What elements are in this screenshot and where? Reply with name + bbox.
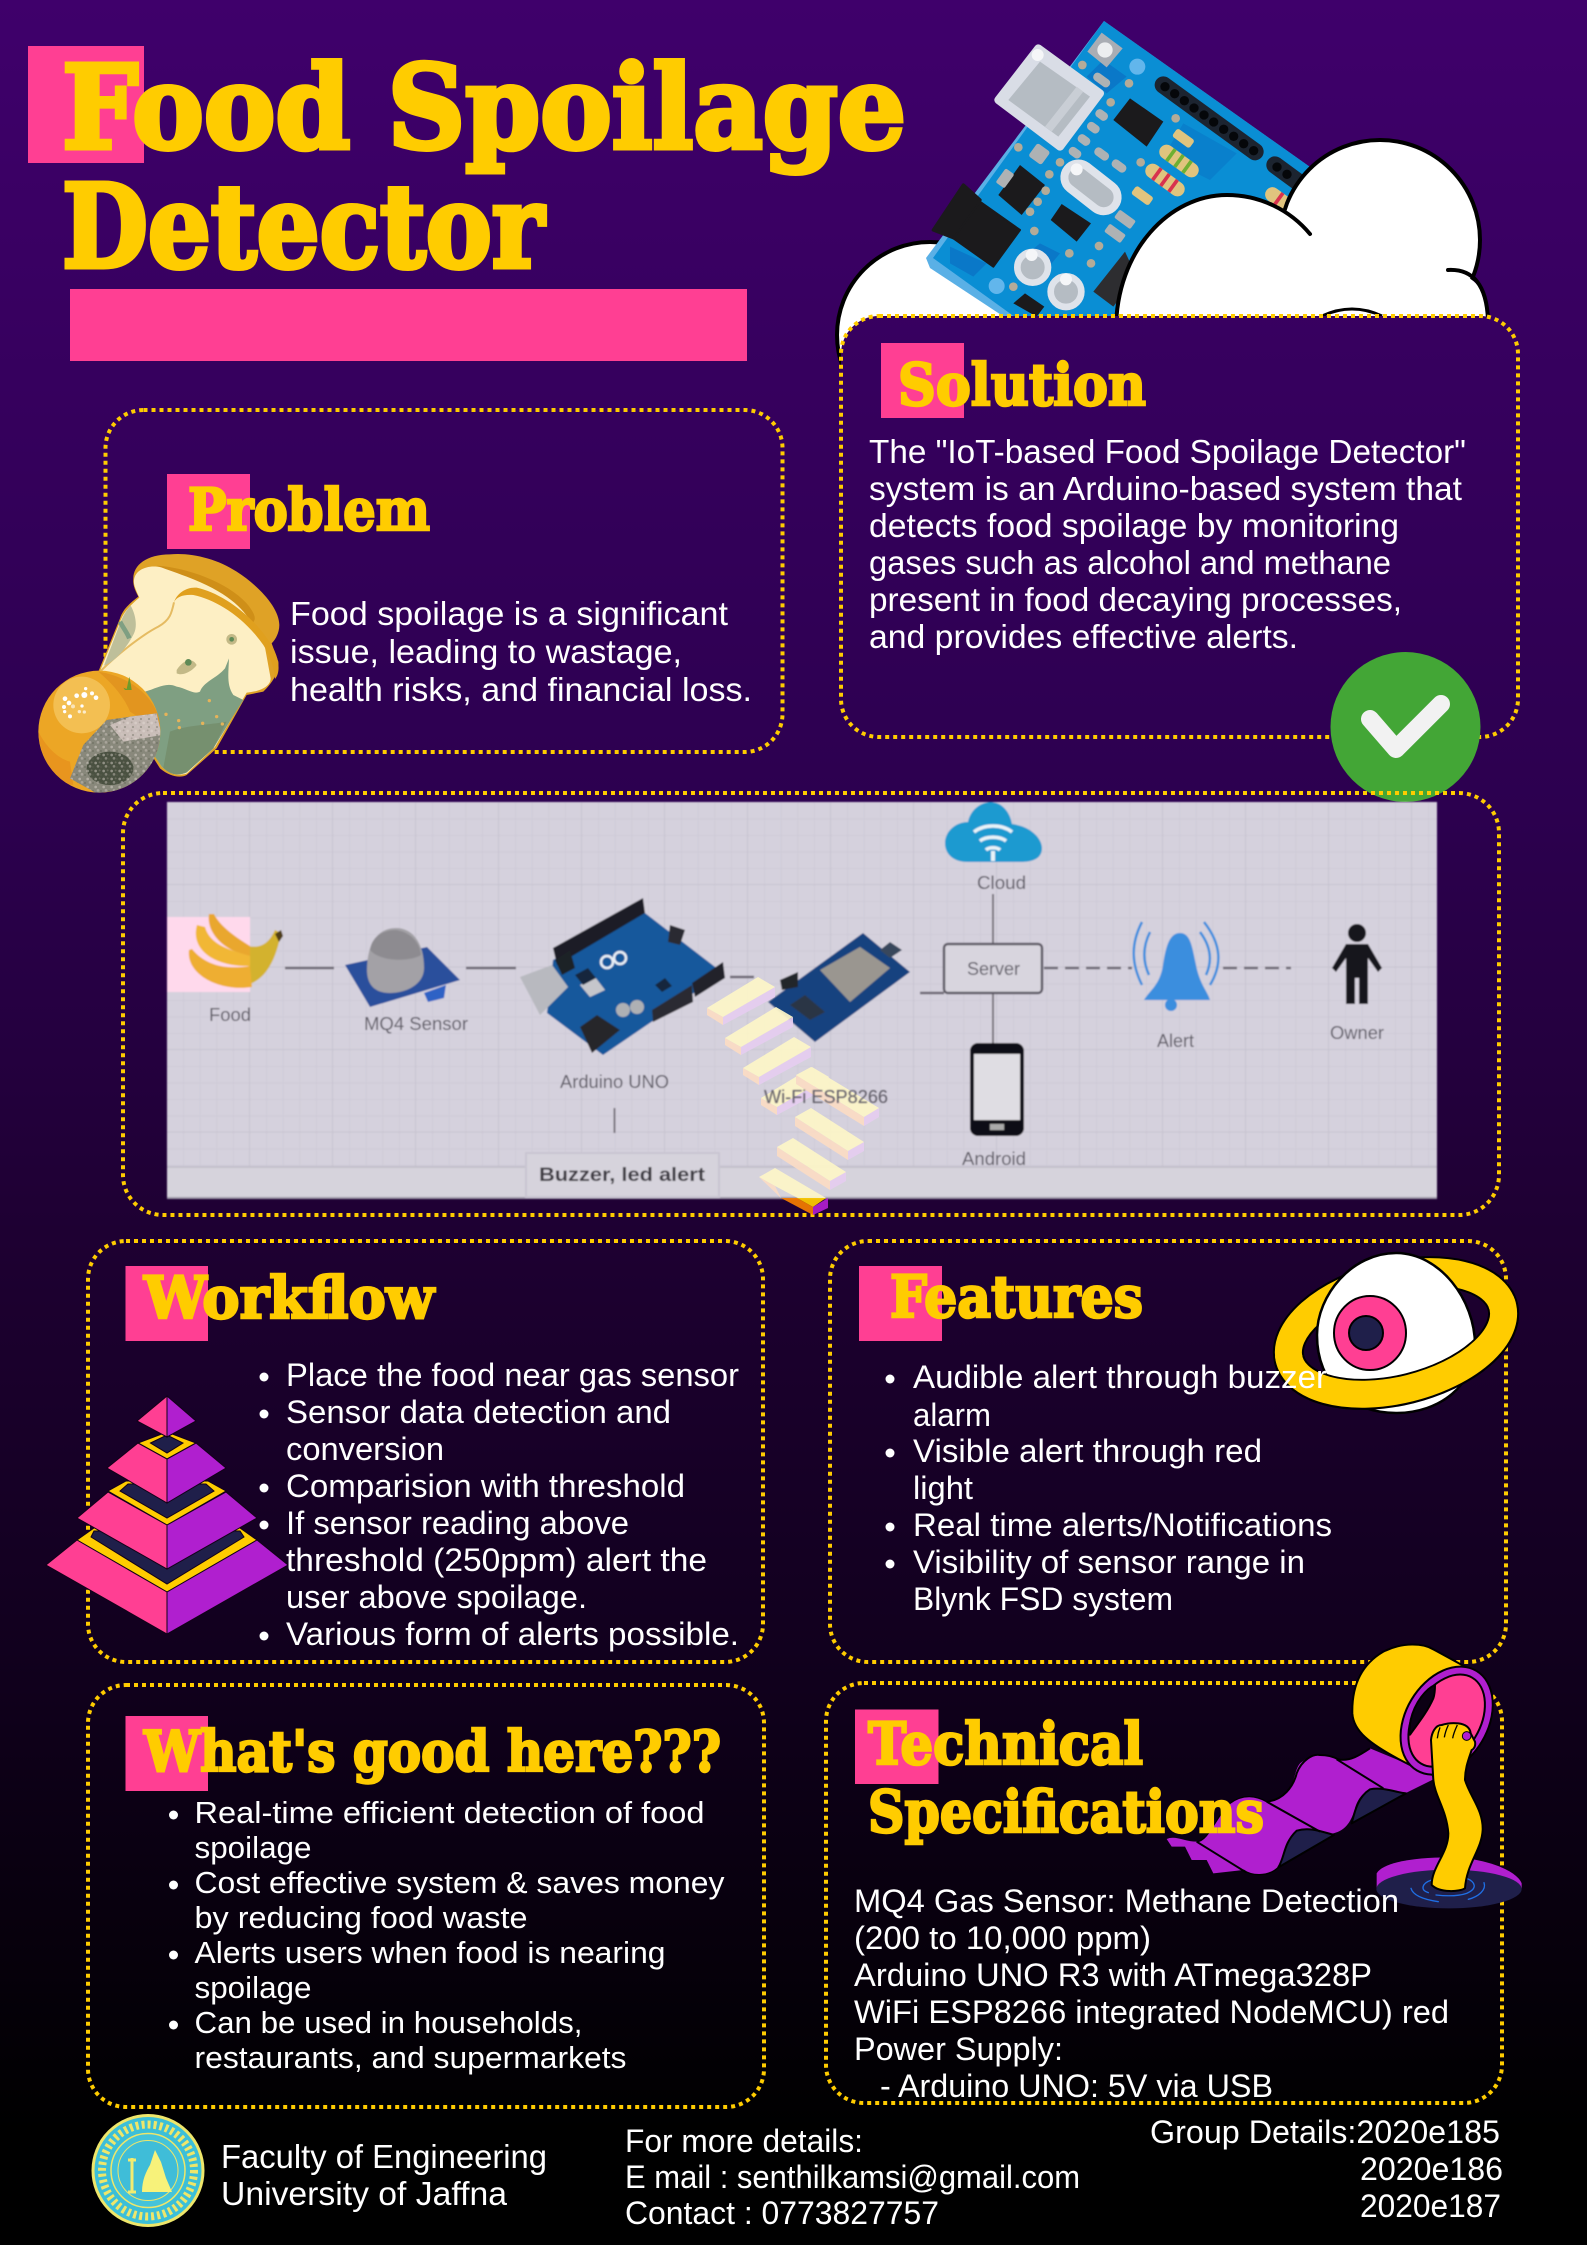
workflow frame [88,1241,763,1662]
diagram frame [123,793,1499,1215]
workflow list: threshold (250ppm) alert the [286,1542,707,1578]
workflow highlight box [126,1266,208,1341]
footer: contact details: E mail : senthilkamsi@gmail.com [625,2159,1080,2195]
workflow list [260,1357,739,1652]
workflow list: Various form of alerts possible. [286,1616,739,1652]
panel: system diagram [123,793,1499,1215]
panel: solution [841,316,1518,802]
tech body text: - Arduino UNO: 5V via USB [880,2068,1273,2104]
workflow list: Comparision with threshold [286,1468,685,1504]
footer: faculty text [221,2138,547,2212]
footer: group details: 2020e186 [1360,2151,1503,2187]
whats good list: spoilage [194,1970,312,2005]
decorative zigzag stripes [707,977,879,1215]
features list: Visibility of sensor range in [913,1544,1305,1580]
panel: what's good here [88,1685,764,2107]
solution body text: present in food decaying processes, [869,581,1402,618]
illustration: arduino board [926,21,1310,402]
diagram labels: Arduino UNO [560,1072,669,1092]
whats good highlight box [126,1716,208,1791]
problem body text: Food spoilage is a significant [290,595,728,632]
icon: bananas [189,914,283,988]
panel: technical specifications [826,1644,1522,2104]
solution body text: detects food spoilage by monitoring [869,507,1399,544]
icon: pyramid [46,1396,288,1634]
whats good list: Real-time efficient detection of food [194,1795,704,1830]
buzzer box: Buzzer, led alert [539,1165,706,1186]
footer: group details: 2020e187 [1360,2188,1501,2224]
problem heading: Problem [188,476,430,544]
icon: MQ4 sensor [345,928,460,1007]
diagram labels: Alert [1157,1031,1194,1051]
icon: tape and hand [1167,1644,1522,1908]
title highlight box [28,46,144,163]
whats good list: spoilage [194,1830,312,1865]
icon: mouldy bread and orange [38,554,279,793]
diagram image [167,802,1437,1199]
diagram labels [209,873,1384,1169]
workflow list: conversion [286,1431,444,1467]
title text: Detector [62,160,545,295]
title text [62,41,906,295]
features frame [830,1241,1506,1662]
footer: contact details [625,2123,1080,2231]
footer: group details: Group Details:2020e185 [1150,2114,1500,2150]
title text: Food Spoilage [62,41,906,176]
solution body text [869,433,1466,655]
footer: group details [1150,2114,1503,2224]
whats good list: Alerts users when food is nearing [194,1935,666,1970]
tech body text: Arduino UNO R3 with ATmega328P [854,1957,1372,1993]
workflow list: If sensor reading above [286,1505,629,1541]
tech body text: Power Supply: [854,2031,1063,2067]
workflow list: user above spoilage. [286,1579,587,1615]
problem frame [106,410,782,752]
problem highlight box [167,474,250,549]
icon: Wi-Fi ESP8266 [768,933,910,1042]
features highlight box [859,1266,942,1341]
solution body text: system is an Arduino-based system that [869,470,1462,507]
footer: contact details: Contact : 0773827757 [625,2195,939,2231]
whats good heading: What's good here??? [143,1719,721,1785]
panel: problem [38,410,782,793]
buzzer box [526,1153,719,1197]
tech body text: WiFi ESP8266 integrated NodeMCU) red [854,1994,1449,2030]
title [28,41,906,361]
footer: university logo [93,2116,203,2226]
solution body text: The "IoT-based Food Spoilage Detector" [869,433,1466,470]
features heading: Features [890,1263,1143,1331]
workflow list: Place the food near gas sensor [286,1357,739,1393]
features list: alarm [913,1397,991,1433]
diagram labels: Android [962,1149,1026,1169]
tech frame [826,1683,1502,2103]
label: Wi-Fi ESP8266: Wi-Fi ESP8266 [764,1087,888,1107]
footer: faculty text: Faculty of Engineering [221,2138,547,2175]
features list: Blynk FSD system [913,1581,1173,1617]
tech body text: MQ4 Gas Sensor: Methane Detection [854,1883,1399,1919]
whats good list [169,1795,725,2075]
icon: android phone [970,1043,1024,1136]
features list: Real time alerts/Notifications [913,1507,1332,1543]
diagram labels: Owner [1330,1023,1384,1043]
features list [886,1359,1332,1617]
icon: Arduino UNO [520,898,725,1055]
workflow list: Sensor data detection and [286,1394,671,1430]
tech heading: Technical [868,1710,1143,1778]
icon: cloud [945,802,1042,862]
tech heading: Specifications [868,1778,1264,1846]
server box: Server [967,959,1020,979]
footer: contact details: For more details: [625,2123,863,2159]
features list: light [913,1470,973,1506]
footer: faculty text: University of Jaffna [221,2175,508,2212]
tech heading [868,1710,1264,1846]
solution body text: gases such as alcohol and methane [869,544,1391,581]
illustration: clouds over board [1116,140,1488,352]
icon: green check [1330,652,1480,802]
icon: owner [1332,924,1382,1004]
diagram labels: Food [209,1005,251,1025]
features list: Visible alert through red [913,1433,1262,1469]
whats good list: Can be used in households, [194,2005,582,2040]
icon: alert bell [1134,922,1218,1011]
illustration: cloud behind solution [837,242,1023,428]
problem body text: health risks, and financial loss. [290,671,752,708]
banana highlight [167,917,250,992]
server box [944,944,1042,993]
tech highlight box [855,1710,938,1784]
whats good frame [88,1685,764,2107]
solution highlight box [881,343,964,418]
diagram labels: Cloud [977,873,1026,893]
title underline bar [70,289,747,361]
solution body text: and provides effective alerts. [869,618,1298,655]
problem body text: issue, leading to wastage, [290,633,682,670]
workflow heading: Workflow [143,1264,436,1332]
diagram labels: MQ4 Sensor [364,1014,468,1034]
panel: features [830,1241,1517,1662]
solution heading: Solution [898,351,1146,419]
panel: workflow [46,1241,763,1662]
whats good list: Cost effective system & saves money [194,1865,725,1900]
whats good list: by reducing food waste [194,1900,528,1935]
icon: eyeball planet [1275,1251,1517,1415]
tech body text: (200 to 10,000 ppm) [854,1920,1151,1956]
whats good list: restaurants, and supermarkets [194,2040,626,2075]
problem body text [290,595,752,708]
board top pad [1087,33,1123,67]
solution frame [841,316,1518,737]
features list: Audible alert through buzzer [913,1359,1327,1395]
tech body text [854,1883,1449,2104]
